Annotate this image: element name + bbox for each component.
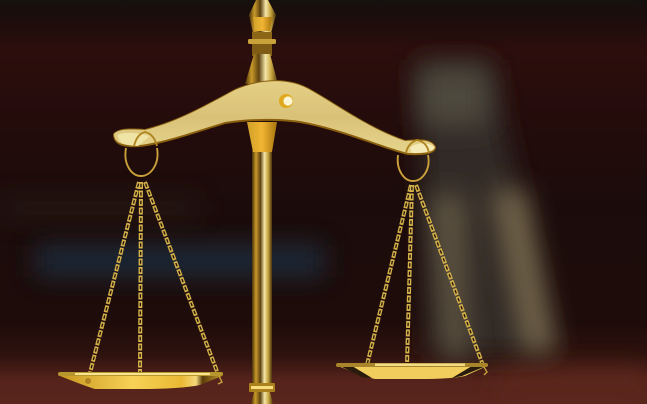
chain: right inner — [416, 185, 484, 368]
background: blurred pale streak right — [430, 195, 468, 358]
background: bottom red glow right — [500, 368, 647, 390]
column rod — [252, 150, 272, 384]
right pan right shadow — [452, 366, 486, 378]
column cone below beam — [247, 122, 277, 152]
beam of scale — [113, 80, 436, 155]
chain: right outer — [367, 185, 411, 365]
chain: left middle — [140, 182, 141, 373]
background: blurred blue book — [35, 245, 325, 277]
right pan — [336, 363, 488, 379]
chain: right middle — [407, 185, 412, 364]
chain: left outer — [90, 182, 139, 373]
background: faint brown band left — [0, 198, 200, 218]
background: blurred grey block upper right — [420, 68, 488, 126]
right pan left shadow — [340, 366, 372, 378]
background: blurred pale streak far right — [492, 190, 555, 352]
left hanger ring — [125, 132, 158, 176]
left pan — [58, 372, 223, 389]
right hanger ring — [398, 140, 429, 181]
beam pivot hole — [279, 94, 293, 108]
beam left tip highlight — [118, 133, 150, 146]
upper flare of column — [245, 54, 278, 84]
finial collar — [252, 32, 272, 39]
column foot — [251, 392, 273, 404]
chain: left inner — [145, 182, 218, 374]
beam right tip highlight — [410, 143, 434, 153]
right chains — [367, 185, 484, 368]
left chains — [90, 182, 218, 374]
background: blurred grey mass behind right scale — [415, 60, 555, 355]
central column of scale — [245, 0, 278, 404]
finial tip — [249, 0, 276, 33]
column base collar — [249, 383, 275, 392]
